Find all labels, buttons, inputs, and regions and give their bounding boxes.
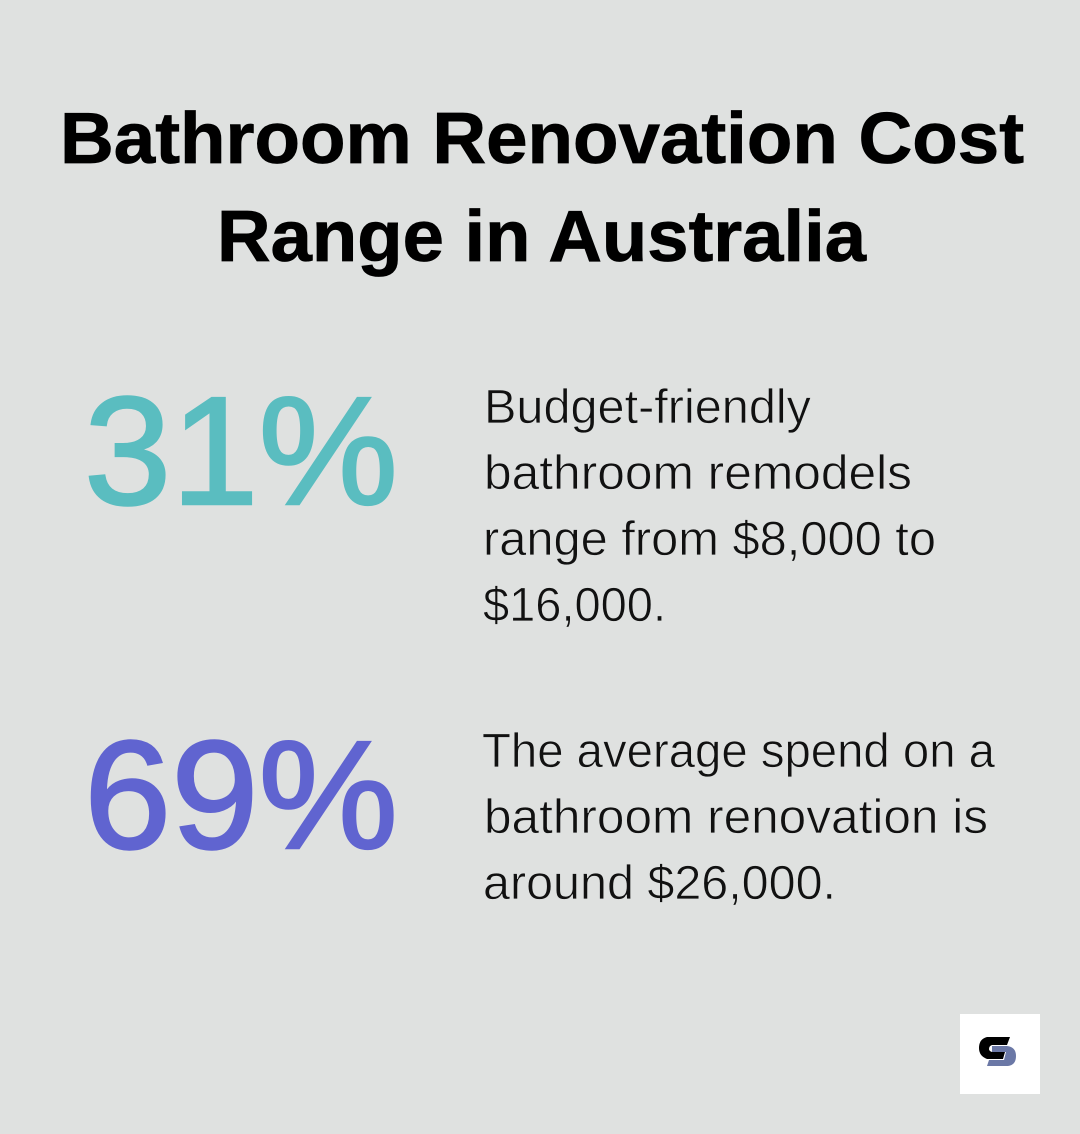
description: budget-friendly remodels: $16,000. [483,579,666,632]
title: Range in Australia [217,197,867,277]
description: average spend: around $26,000. [483,857,836,910]
description: average spend: The average spend on a [482,725,995,778]
description: budget-friendly remodels: Budget-friendly [484,381,811,434]
description: budget-friendly remodels: range from $8,000 to [483,513,936,566]
description: budget-friendly remodels [483,381,936,632]
description: average spend [482,725,995,910]
title: Bathroom Renovation Cost [60,99,1024,179]
description: budget-friendly remodels: bathroom remodels [484,447,912,500]
description: average spend: bathroom renovation is [484,791,988,844]
title [60,99,1024,277]
logo badge [960,1014,1040,1094]
stat: 31%: 31% [84,365,398,537]
stat: 69%: 69% [84,709,398,881]
